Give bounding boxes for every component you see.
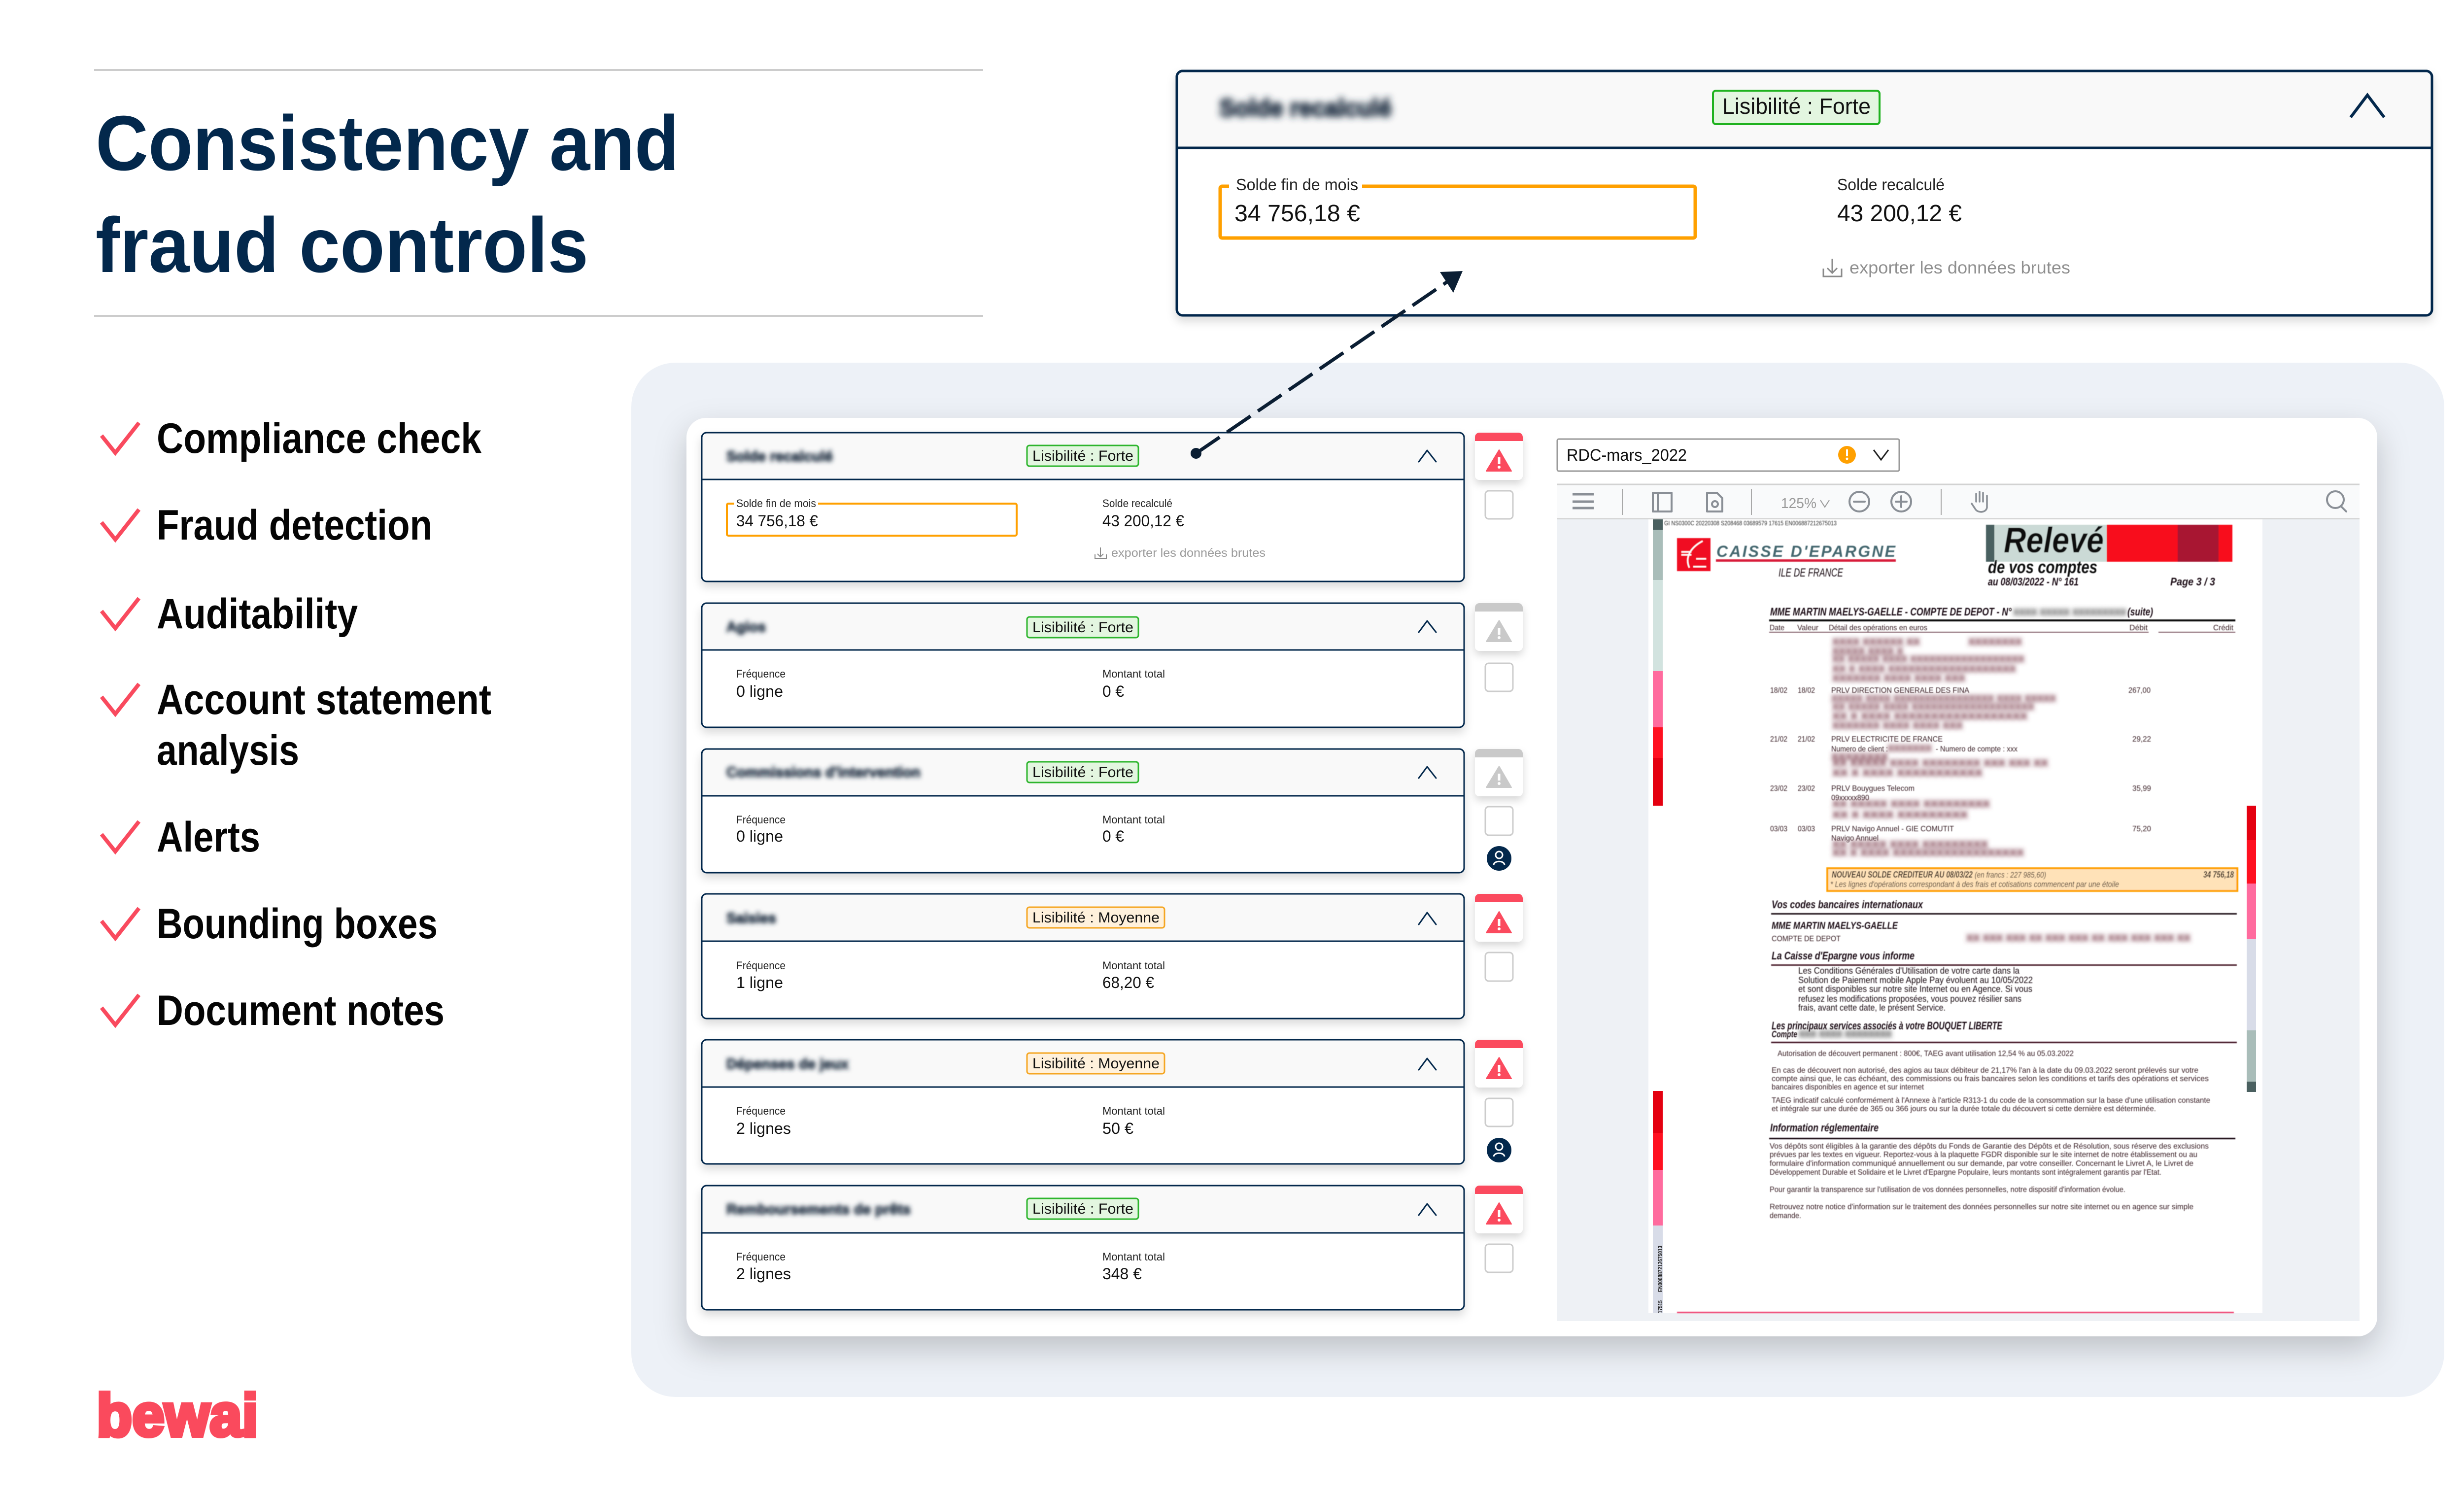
frequency: Fréquence (736, 959, 786, 972)
badge: Lisibilité : Forte (1032, 448, 1133, 464)
margin barcode text: 17515 (1657, 1300, 1664, 1313)
frequency: 0 ligne (736, 827, 783, 845)
checkbox: card 5 (1485, 1098, 1513, 1126)
recalculated balance: Solde recalculé (1102, 497, 1172, 510)
statement text layer: 18/02 (1770, 686, 1787, 695)
icon: document settings (1707, 493, 1722, 511)
frequency (736, 959, 786, 991)
recalculated balance (1102, 497, 1184, 530)
statement text layer: Solution de Paiement mobile Apple Pay évoluent au 10/05/2022 (1798, 975, 2033, 985)
total amount (1102, 959, 1165, 991)
highlighted field: 34 756,18 € (736, 512, 818, 530)
redacted statement lines: XX XXX XXX XX XXX XXX XX XXX XXX XXX XX (1966, 933, 2190, 944)
icon: sidebar (1653, 493, 1672, 511)
alert tab: card 3 (1475, 749, 1523, 796)
statement text layer: En cas de découvert non autorisé, des agios au taux débiteur de 21,17% l'an à la date du 09.03.2022 seront prélevés sur votre (1772, 1066, 2198, 1075)
redacted statement lines: XXXXXXX XXXX XXXX XXX (1832, 674, 1965, 684)
statement text layer: Débit (2129, 624, 2148, 632)
checkbox: card 2 (1485, 663, 1513, 691)
statement text layer: Date (1770, 624, 1784, 632)
statement text layer: 21/02 (1770, 735, 1787, 744)
redacted statement lines: XX XXXXX XXXX XXXXXXXXX (1832, 799, 1990, 810)
icon: search (2327, 491, 2346, 511)
frequency (736, 1251, 791, 1283)
statement text layer: 35,99 (2132, 784, 2151, 793)
document selector: RDC-mars_2022 (1567, 446, 1687, 465)
redacted statement lines: XX XXXXX XXXX XXXXXXXXXXXXXXXXXXX (1832, 702, 2034, 713)
highlighted field: Solde fin de mois (736, 497, 816, 510)
pdf toolbar (1557, 484, 2360, 519)
redacted statement lines: XXXX XXXXXX XX (1832, 637, 1920, 647)
card: depenses de jeux (702, 1040, 1464, 1164)
statement text layer: 23/02 (1798, 784, 1815, 793)
statement text layer: 03/03 (1770, 825, 1787, 833)
statement text layer: PRLV Bouygues Telecom (1831, 784, 1915, 793)
badge: Lisibilité : Moyenne (1032, 1055, 1160, 1072)
statement text layer: La Caisse d'Epargne vous informe (1772, 950, 1915, 962)
statement text layer: Information réglementaire (1770, 1122, 1879, 1134)
item: document notes: Document notes (157, 987, 445, 1034)
chevron (2351, 95, 2384, 117)
export link: exporter les données brutes (1111, 546, 1266, 560)
icon: hand (1972, 492, 1987, 512)
caisse d'epargne logo: ILE DE FRANCE (1779, 566, 1844, 579)
statement text layer: COMPTE DE DEPOT (1772, 935, 1841, 943)
total amount: Montant total (1102, 959, 1165, 972)
blurred title: Commissions d'intervention (726, 764, 921, 781)
redacted statement lines: XX X XXXX XXXXXXXXXXXXXXXXXXX (1832, 664, 2016, 675)
statement text layer: GI NS0300C 20220308 S208468 03689579 17615 EN006887212675013 (1664, 519, 1837, 527)
title block: fraud controls (96, 202, 588, 289)
redacted statement lines: XX XXXXX XXXX XXXXXXXXXXXXXXXXXX (1832, 654, 2024, 665)
logo: bewai: bewai (97, 1382, 258, 1449)
statement text layer: 23/02 (1770, 784, 1787, 793)
statement text layer: compte ainsi que, le cas échéant, des commissions ou frais bancaires selon les conditions et tarifs des opérations et services (1772, 1075, 2209, 1083)
releve header block (1986, 521, 2232, 588)
statement text layer: 09xxxxx890 (1831, 794, 1869, 802)
statement text layer: Numero de client : (1831, 745, 1888, 753)
statement text layer: (suite) (2127, 606, 2153, 618)
right colour strip (2247, 806, 2256, 1092)
blurred card title: Solde recalculé (1219, 94, 1392, 122)
panel: application window (686, 418, 2377, 1336)
total amount: 0 € (1102, 682, 1124, 700)
statement text layer: PRLV DIRECTION GENERALE DES FINA (1831, 686, 1969, 695)
item: account statement analysis: Account statement (157, 676, 491, 723)
frequency: 0 ligne (736, 682, 783, 700)
statement text layer: Compte (1772, 1029, 1797, 1039)
recalculated balance: 43 200,12 € (1837, 201, 1962, 227)
blurred title: Remboursements de prêts (726, 1201, 911, 1218)
item: fraud detection: Fraud detection (157, 502, 432, 549)
frequency: 1 ligne (736, 974, 783, 991)
blurred title: Saisies (726, 910, 776, 926)
total amount: 50 € (1102, 1120, 1133, 1137)
statement text layer: 29,22 (2132, 735, 2151, 744)
statement text layer: Valeur (1797, 624, 1819, 632)
pdf page: bank statement (1648, 519, 2262, 1313)
card: solde recalcule (702, 433, 1464, 581)
icon: user avatar card 3 (1487, 846, 1511, 871)
redacted statement lines: XXXXXXX XXXX XXXX XXX (1832, 721, 1963, 731)
title: Consistency and (96, 100, 679, 187)
badge: legibility strong: Lisibilité : Forte (1722, 94, 1871, 119)
item: account statement analysis: analysis (157, 727, 299, 774)
export link: exporter les données brutes (1849, 258, 2070, 277)
total amount: 0 € (1102, 827, 1124, 845)
redacted statement lines (1799, 608, 2190, 1040)
chevron (1419, 1058, 1436, 1070)
checkbox: card 4 (1485, 953, 1513, 981)
icon: warning dot (1838, 446, 1856, 464)
statement text layer: refusez les modifications proposées, vous pouvez résilier sans (1798, 994, 2021, 1004)
badge: Lisibilité : Forte (1032, 1201, 1133, 1217)
card: remboursements de prets (702, 1186, 1464, 1310)
caisse d'epargne logo: CAISSE D'EPARGNE (1716, 543, 1896, 560)
alert tab: card 2 (1475, 603, 1523, 651)
statement text layer: Les Conditions Générales d'Utilisation de votre carte dans la (1798, 966, 2020, 976)
redacted statement lines: XX XXXXX XXXX XXXXXXXX XXX XXX XX (1832, 758, 2048, 769)
chevron (1419, 767, 1436, 778)
highlighted field: 34 756,18 € (1234, 201, 1360, 227)
statement text layer: frais, avant cette date, le présent Service. (1798, 1003, 1946, 1013)
checkbox: card 1 (1485, 491, 1513, 519)
statement text layer (1664, 519, 2237, 1313)
total amount: 68,20 € (1102, 974, 1154, 991)
statement text layer: Navigo Annuel (1831, 834, 1879, 843)
total amount: Montant total (1102, 668, 1165, 680)
zoom level: 125% (1781, 496, 1816, 511)
item: auditability: Auditability (157, 590, 358, 638)
icon: user avatar card 5 (1487, 1138, 1511, 1162)
blurred title: Agios (726, 619, 766, 635)
alert tab: card 5 (1475, 1040, 1523, 1088)
alert tab: card 1 (1475, 433, 1523, 480)
icon: menu (1573, 494, 1594, 508)
recalculated balance (1837, 175, 1962, 227)
badge: legibility strong (1713, 91, 1880, 124)
item: alerts: Alerts (157, 814, 260, 861)
highlighted balance line: (en francs : 227 985,60) (1975, 870, 2046, 880)
frequency (736, 814, 786, 845)
highlighted field (1220, 175, 1695, 238)
total amount: Montant total (1102, 1251, 1165, 1263)
blurred title: Dépenses de jeux (726, 1056, 849, 1072)
releve header block: au 08/03/2022 - N° 161 (1988, 576, 2079, 588)
statement text layer: PRLV Navigo Annuel - GIE COMUTIT (1831, 825, 1954, 833)
redacted statement lines: XXXXX XXXX X (1832, 647, 1903, 657)
chevron (1419, 913, 1436, 924)
statement text layer: Les principaux services associés à votre BOUQUET LIBERTE (1772, 1020, 2003, 1032)
title block (94, 70, 983, 316)
frequency: Fréquence (736, 668, 786, 680)
frequency: Fréquence (736, 814, 786, 826)
card: saisies (702, 894, 1464, 1019)
total amount: Montant total (1102, 814, 1165, 826)
frequency: 2 lignes (736, 1265, 791, 1283)
statement text layer: MME MARTIN MAELYS-GAELLE (1772, 920, 1898, 931)
item: account statement analysis (102, 676, 491, 774)
releve header block: de vos comptes (1988, 557, 2097, 577)
redacted statement lines: XX X XXXX XXXXXXXXXXX (1832, 768, 1983, 779)
chevron (1419, 450, 1436, 462)
checkbox: card 6 (1485, 1244, 1513, 1272)
redacted statement lines: XX X XXXX XXXXXXXXXXXXXXXXXX (1832, 712, 2027, 722)
releve header block: Relevé (2004, 521, 2104, 560)
frequency: Fréquence (736, 1251, 786, 1263)
redacted statement lines: XXXXXXXX (1968, 637, 2022, 647)
statement text layer: 75,20 (2132, 825, 2151, 833)
statement text layer: Détail des opérations en euros (1829, 624, 1927, 632)
statement text layer: Crédit (2213, 624, 2234, 632)
icon: zoom out (1849, 492, 1869, 511)
statement text layer: Vos dépôts sont éligibles à la garantie des dépôts du Fonds de Garantie des Dépôts et de Résolution, sous réserve des exclusions (1770, 1142, 2209, 1151)
chevron (1419, 621, 1436, 632)
statement text layer: MME MARTIN MAELYS-GAELLE - COMPTE DE DEPOT - N° (1770, 606, 2012, 618)
margin barcode text (1657, 1246, 1664, 1313)
frequency: Fréquence (736, 1105, 786, 1117)
frequency (736, 668, 786, 700)
caisse d'epargne logo (1677, 538, 1896, 579)
highlighted field: Solde fin de mois (1236, 175, 1358, 194)
badge: Lisibilité : Forte (1032, 764, 1133, 781)
statement text layer: prévues par les textes en vigueur. Reportez-vous à la plaquette FGDR disponible sur le site internet de notre établissement ou au (1770, 1151, 2197, 1159)
redacted statement lines: XXXXXXXX (1831, 752, 1888, 762)
redacted statement lines: XXXXXXX (1887, 744, 1932, 754)
total amount (1102, 1251, 1165, 1283)
releve header block: Page 3 / 3 (2170, 576, 2215, 588)
statement text layer: 267,00 (2128, 686, 2151, 695)
statement text layer: bancaires disponibles en agence et sur internet (1772, 1083, 1924, 1091)
statement text layer: 18/02 (1798, 686, 1815, 695)
statement text layer: demande. (1770, 1212, 1801, 1220)
margin barcode text: EN006887212675013 (1657, 1246, 1664, 1292)
redacted statement lines: XX XXXXX XXXX XXXXXXXXX (1832, 840, 1988, 850)
redacted statement lines: XXX XXXX XXXXXXXX (1799, 1029, 1892, 1040)
redacted statement lines: XX X XXXX XXXXXXXXXXXXXXXXXX (1832, 848, 2024, 858)
statement text layer: formulaire d'information communiqué annuellement ou sur demande, par votre conseiller. Concernant le Livret A, le Livret de (1770, 1159, 2193, 1168)
total amount: 348 € (1102, 1265, 1142, 1283)
statement text layer: 03/03 (1798, 825, 1815, 833)
statement text layer: et intégrale sur une durée de 365 ou 366 jours ou sur la durée totale du découvert si cette dernière est déterminée. (1772, 1105, 2156, 1113)
redacted statement lines: XXXXX XXXX XXXXXXXXXXXXXXXX XXXX XXXXX (1831, 694, 2056, 704)
highlighted balance line: NOUVEAU SOLDE CREDITEUR AU 08/03/22 (1832, 870, 1973, 880)
item: alerts (102, 814, 260, 861)
item: compliance check: Compliance check (157, 415, 481, 462)
highlighted balance line (1827, 868, 2237, 891)
statement text layer: TAEG indicatif calculé conformément à l'Annexe à l'article R313-1 du code de la consommation sur la base d'une utilisation constante (1772, 1096, 2210, 1105)
statement text layer: Retrouvez notre notice d'information sur le traitement des données personnelles sur notre site internet ou en agence sur simple (1770, 1203, 2193, 1211)
panel: background (631, 363, 2444, 1397)
redacted statement lines: XX X XXXX XXXXXXXXX (1832, 810, 1968, 820)
statement text layer: 21/02 (1798, 735, 1815, 744)
card: commissions d'intervention (702, 749, 1464, 873)
panel: zoomed control card (1177, 71, 2432, 315)
alert tab: card 4 (1475, 894, 1523, 942)
pdf viewer background (1557, 519, 2360, 1321)
recalculated balance: 43 200,12 € (1102, 512, 1184, 530)
total amount (1102, 668, 1165, 700)
recalculated balance: Solde recalculé (1837, 175, 1945, 194)
card: agios (702, 603, 1464, 727)
total amount (1102, 1105, 1165, 1137)
document selector (1557, 439, 1899, 471)
blurred title: Solde recalculé (726, 448, 833, 465)
left colour strip (1653, 519, 1663, 1313)
statement text layer: Développement Durable et Solidaire et le Livret d'Epargne Populaire, leurs montants sont intégralement garantis par l'Etat. (1770, 1168, 2161, 1177)
statement text layer: et sont disponibles sur notre site Internet ou en Agence. Si vous (1798, 984, 2032, 994)
total amount: Montant total (1102, 1105, 1165, 1117)
chevron (1419, 1204, 1436, 1215)
highlighted field (727, 497, 1017, 536)
statement text layer: PRLV ELECTRICITE DE FRANCE (1831, 735, 1943, 744)
arrow: card field to zoomed view (1191, 271, 1463, 459)
feature checklist (102, 415, 491, 1034)
total amount (1102, 814, 1165, 845)
highlighted balance line: * Les lignes d'opérations correspondant à des frais et cotisations commencent par une étoile (1830, 880, 2119, 889)
frequency (736, 1105, 791, 1137)
statement text layer: Autorisation de découvert permanent : 800€, TAEG avant utilisation 12,54 % au 05.03.2022 (1778, 1050, 2074, 1058)
alert tab: card 6 (1475, 1186, 1523, 1233)
redacted statement lines: XXXX XXXXX XXXXXXXXX (2013, 608, 2126, 618)
checkbox: card 3 (1485, 807, 1513, 835)
highlighted balance line: 34 756,18 (2203, 870, 2234, 880)
badge: Lisibilité : Moyenne (1032, 910, 1160, 926)
statement text layer: Vos codes bancaires internationaux (1772, 898, 1923, 911)
badge: Lisibilité : Forte (1032, 619, 1133, 636)
statement text layer: Pour garantir la transparence sur l'utilisation de vos données personnelles, notre dispositif d'information évolue. (1770, 1186, 2125, 1194)
statement text layer: - Numero de compte : xxx (1936, 745, 2018, 753)
icon: zoom in (1891, 492, 1911, 511)
frequency: 2 lignes (736, 1120, 791, 1137)
item: bounding boxes: Bounding boxes (157, 900, 438, 948)
